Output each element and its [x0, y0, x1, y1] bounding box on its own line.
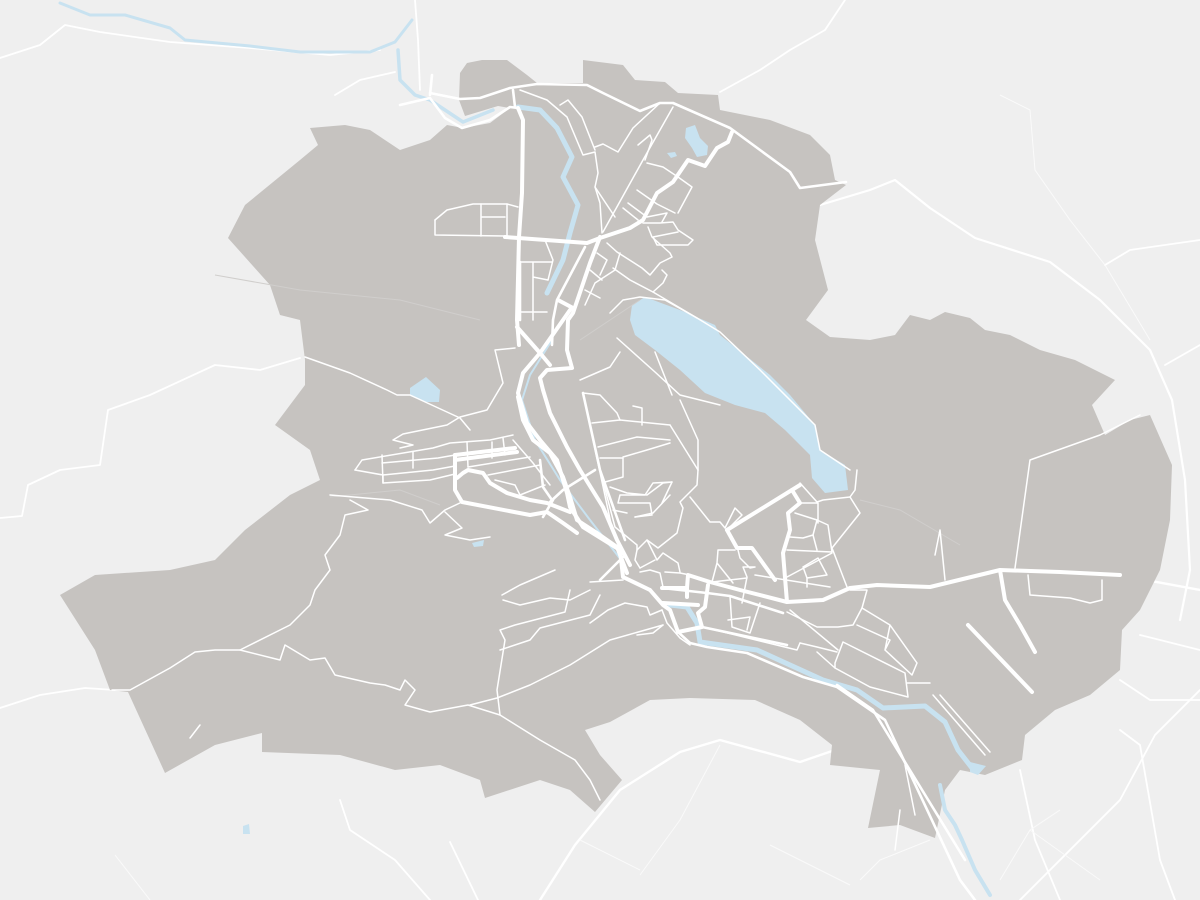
- water: lakes: [243, 125, 986, 834]
- lake: north pond: [685, 125, 708, 157]
- river: upper bend: [398, 50, 493, 122]
- pond: far south-west: [243, 824, 250, 834]
- lake: large: [630, 297, 848, 493]
- west arm: [305, 357, 470, 430]
- pond: south: [472, 540, 484, 547]
- south-west of bend: [590, 603, 662, 623]
- river: central: [518, 107, 578, 293]
- centre east: [583, 393, 613, 533]
- south-west long: [330, 495, 462, 523]
- thin roads: [112, 90, 1140, 850]
- pond: south-east: [970, 762, 986, 775]
- north area: [520, 90, 602, 233]
- main roads: [455, 108, 1120, 692]
- outer faint roads: [115, 95, 1150, 900]
- river: north-west: [60, 3, 412, 52]
- south lines: [895, 765, 915, 850]
- pond: north small: [667, 152, 677, 158]
- rivers: [60, 3, 990, 895]
- river: south-east: [670, 605, 972, 768]
- medium roads: [400, 75, 975, 900]
- river: south outlet: [940, 785, 990, 895]
- faint interior lines: [215, 275, 960, 545]
- lake: small west: [410, 377, 440, 402]
